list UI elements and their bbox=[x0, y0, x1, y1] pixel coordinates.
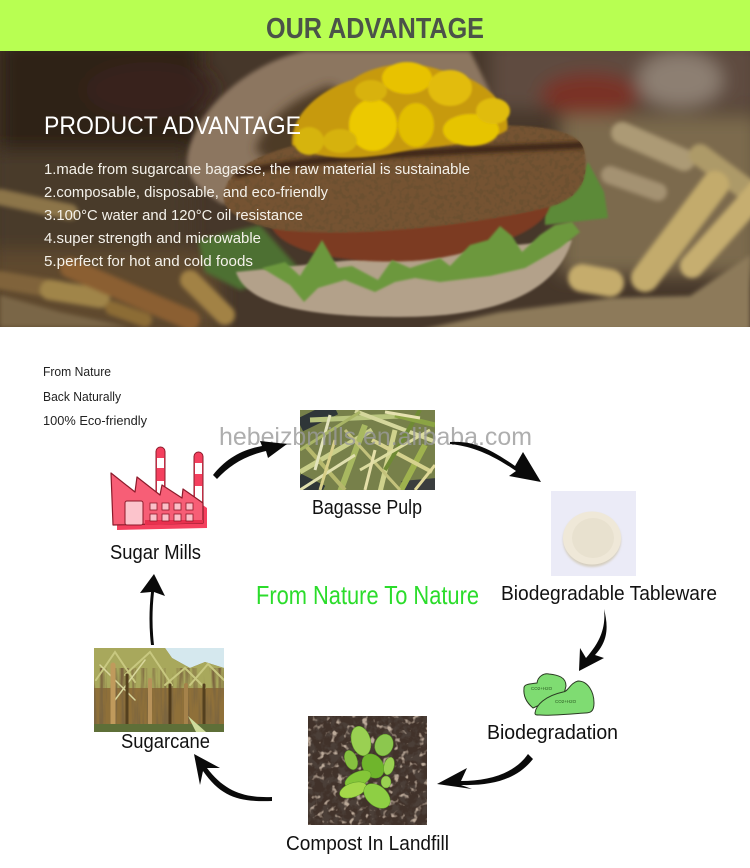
fries right bbox=[582, 133, 750, 283]
photo: sugarcane field bbox=[94, 648, 224, 732]
advantages list: 5.perfect for hot and cold foods bbox=[44, 253, 253, 270]
arrow: tableware to biodegradation bbox=[579, 609, 607, 671]
panel: bagasse pulp bbox=[298, 408, 437, 519]
advantages list: 2.composable, disposable, and eco-friendly bbox=[44, 184, 328, 201]
tagline text block bbox=[43, 365, 148, 428]
label: Sugarcane bbox=[121, 731, 210, 753]
arrow: biodegradation to compost bbox=[437, 754, 533, 789]
panel: biodegradable tableware bbox=[501, 491, 717, 605]
panel: sugarcane bbox=[94, 648, 224, 753]
panel: sugar mills bbox=[110, 447, 207, 564]
corn topping bbox=[292, 62, 510, 158]
top bun bbox=[187, 51, 505, 204]
tagline text block: 100% Eco-friendly bbox=[43, 414, 148, 428]
panel: biodegradation bbox=[487, 674, 618, 744]
label: Biodegradable Tableware bbox=[501, 583, 717, 605]
left dark lettuce bbox=[198, 225, 300, 290]
lower bun bbox=[236, 240, 572, 317]
advantages list: 4.super strength and microwable bbox=[44, 230, 261, 247]
label: Bagasse Pulp bbox=[312, 497, 422, 519]
patty bbox=[224, 125, 586, 233]
advantages list bbox=[44, 161, 470, 270]
hero panel: burger photo with product advantage text bbox=[0, 40, 750, 335]
watermark: hebeizbmills.en.alibaba.com bbox=[219, 423, 532, 451]
photo: bagasse fibres bbox=[298, 408, 437, 492]
lettuce bbox=[545, 162, 608, 225]
icon: green clouds: CO2+H2O bbox=[555, 699, 577, 704]
lettuce front bbox=[262, 222, 580, 302]
label: Biodegradation bbox=[487, 722, 618, 744]
arrow: mills to bagasse bbox=[213, 441, 287, 479]
photo: plate bbox=[551, 491, 636, 576]
panel: compost in landfill bbox=[286, 716, 449, 855]
header banner bbox=[0, 0, 750, 51]
advantages list: 1.made from sugarcane bagasse, the raw material is sustainable bbox=[44, 161, 470, 178]
label: Compost In Landfill bbox=[286, 833, 449, 855]
title: our advantage: OUR ADVANTAGE bbox=[266, 13, 484, 45]
burger photo bbox=[0, 40, 750, 335]
photo: seedling in soil bbox=[308, 716, 427, 825]
label: Sugar Mills bbox=[110, 542, 201, 564]
arrow: compost to sugarcane bbox=[194, 754, 272, 801]
arrow: bagasse to tableware bbox=[450, 442, 541, 482]
center slogan: From Nature To Nature bbox=[256, 580, 479, 610]
fries left bbox=[0, 197, 225, 320]
advantages list: 3.100°C water and 120°C oil resistance bbox=[44, 207, 303, 224]
icon: green clouds: CO2+H2O bbox=[531, 686, 553, 691]
icon: factory bbox=[111, 447, 207, 530]
tagline text block: From Nature bbox=[43, 365, 111, 379]
tomato bbox=[272, 205, 550, 262]
heading: product advantage: PRODUCT ADVANTAGE bbox=[44, 112, 301, 140]
paper right bbox=[420, 255, 750, 330]
icon: green clouds bbox=[524, 674, 594, 715]
arrow: sugarcane to mills bbox=[140, 574, 165, 645]
tagline text block: Back Naturally bbox=[43, 390, 122, 404]
